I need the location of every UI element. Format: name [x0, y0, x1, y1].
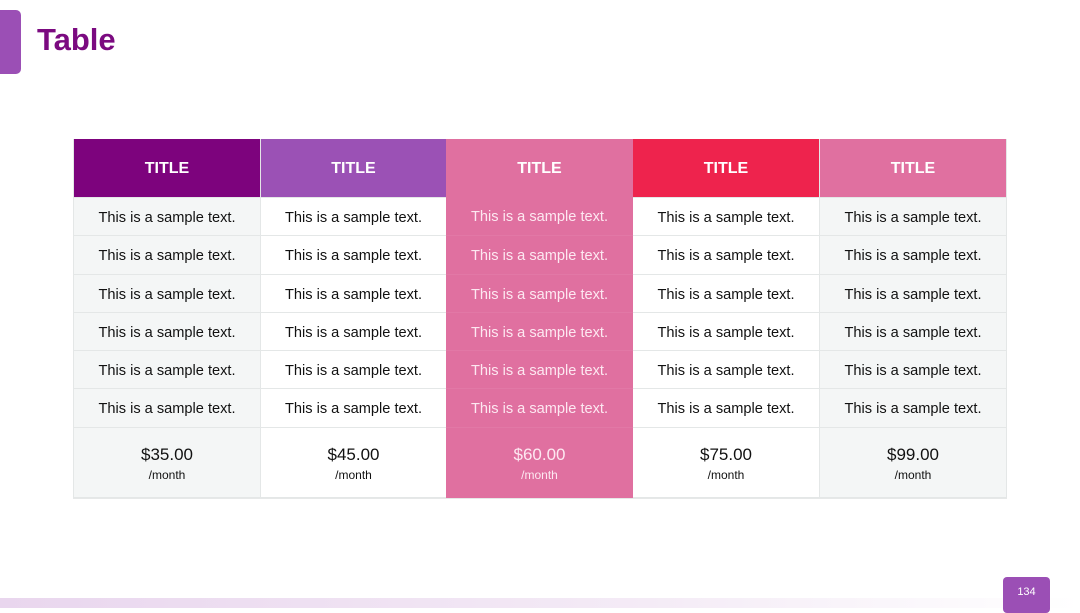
column 1: TITLE	[145, 160, 189, 177]
column 4: This is a sample text.	[657, 287, 795, 303]
column 5: /month	[895, 468, 931, 482]
column 4	[633, 139, 819, 498]
column 2: TITLE	[331, 160, 376, 177]
footer gradient bar	[0, 598, 1080, 608]
column 1: $35.00	[141, 445, 193, 464]
column 4: This is a sample text.	[657, 401, 795, 417]
title: Table	[37, 22, 116, 57]
column 2: This is a sample text.	[285, 248, 422, 264]
column 2: This is a sample text.	[285, 401, 422, 417]
column 3 highlighted: This is a sample text.	[471, 209, 608, 225]
column 3 highlighted: This is a sample text.	[471, 325, 608, 341]
column 1: This is a sample text.	[98, 248, 236, 264]
column 3 highlighted: TITLE	[517, 160, 562, 177]
column 5	[819, 139, 1007, 498]
column 3 highlighted: /month	[521, 468, 558, 482]
column 4: This is a sample text.	[657, 325, 795, 341]
column 2	[260, 139, 446, 498]
column 2: This is a sample text.	[285, 287, 422, 303]
column 3 highlighted	[446, 139, 633, 498]
column 3 highlighted: This is a sample text.	[471, 287, 608, 303]
column 4: TITLE	[704, 160, 748, 177]
column 4: This is a sample text.	[657, 210, 795, 226]
column 1	[73, 139, 260, 498]
column 1: This is a sample text.	[98, 287, 236, 303]
column 4: /month	[708, 468, 744, 482]
column 3 highlighted: This is a sample text.	[471, 248, 608, 264]
column 5: TITLE	[891, 160, 935, 177]
table	[73, 139, 1007, 499]
title badge	[0, 10, 21, 74]
column 5: This is a sample text.	[844, 287, 982, 303]
page number badge: 134	[1017, 586, 1036, 598]
column 5: This is a sample text.	[844, 210, 982, 226]
column 1: This is a sample text.	[98, 210, 236, 226]
column 5: This is a sample text.	[844, 363, 982, 379]
column 2: This is a sample text.	[285, 325, 422, 341]
column 3 highlighted: This is a sample text.	[471, 363, 608, 379]
column 2: This is a sample text.	[285, 210, 422, 226]
column 1: This is a sample text.	[98, 401, 236, 417]
column 5: This is a sample text.	[844, 401, 982, 417]
column 4: This is a sample text.	[657, 248, 795, 264]
column 4: $75.00	[700, 445, 752, 464]
column 1: /month	[149, 468, 185, 482]
column 4: This is a sample text.	[657, 363, 795, 379]
column 5: This is a sample text.	[844, 325, 982, 341]
column 3 highlighted: This is a sample text.	[471, 401, 608, 417]
column 2: $45.00	[328, 445, 380, 464]
column 2: /month	[335, 468, 372, 482]
column 3 highlighted: $60.00	[514, 445, 566, 464]
column 5: This is a sample text.	[844, 248, 982, 264]
column 1: This is a sample text.	[98, 363, 236, 379]
column 1: This is a sample text.	[98, 325, 236, 341]
column 5: $99.00	[887, 445, 939, 464]
column 2: This is a sample text.	[285, 363, 422, 379]
page number badge	[1003, 577, 1050, 613]
